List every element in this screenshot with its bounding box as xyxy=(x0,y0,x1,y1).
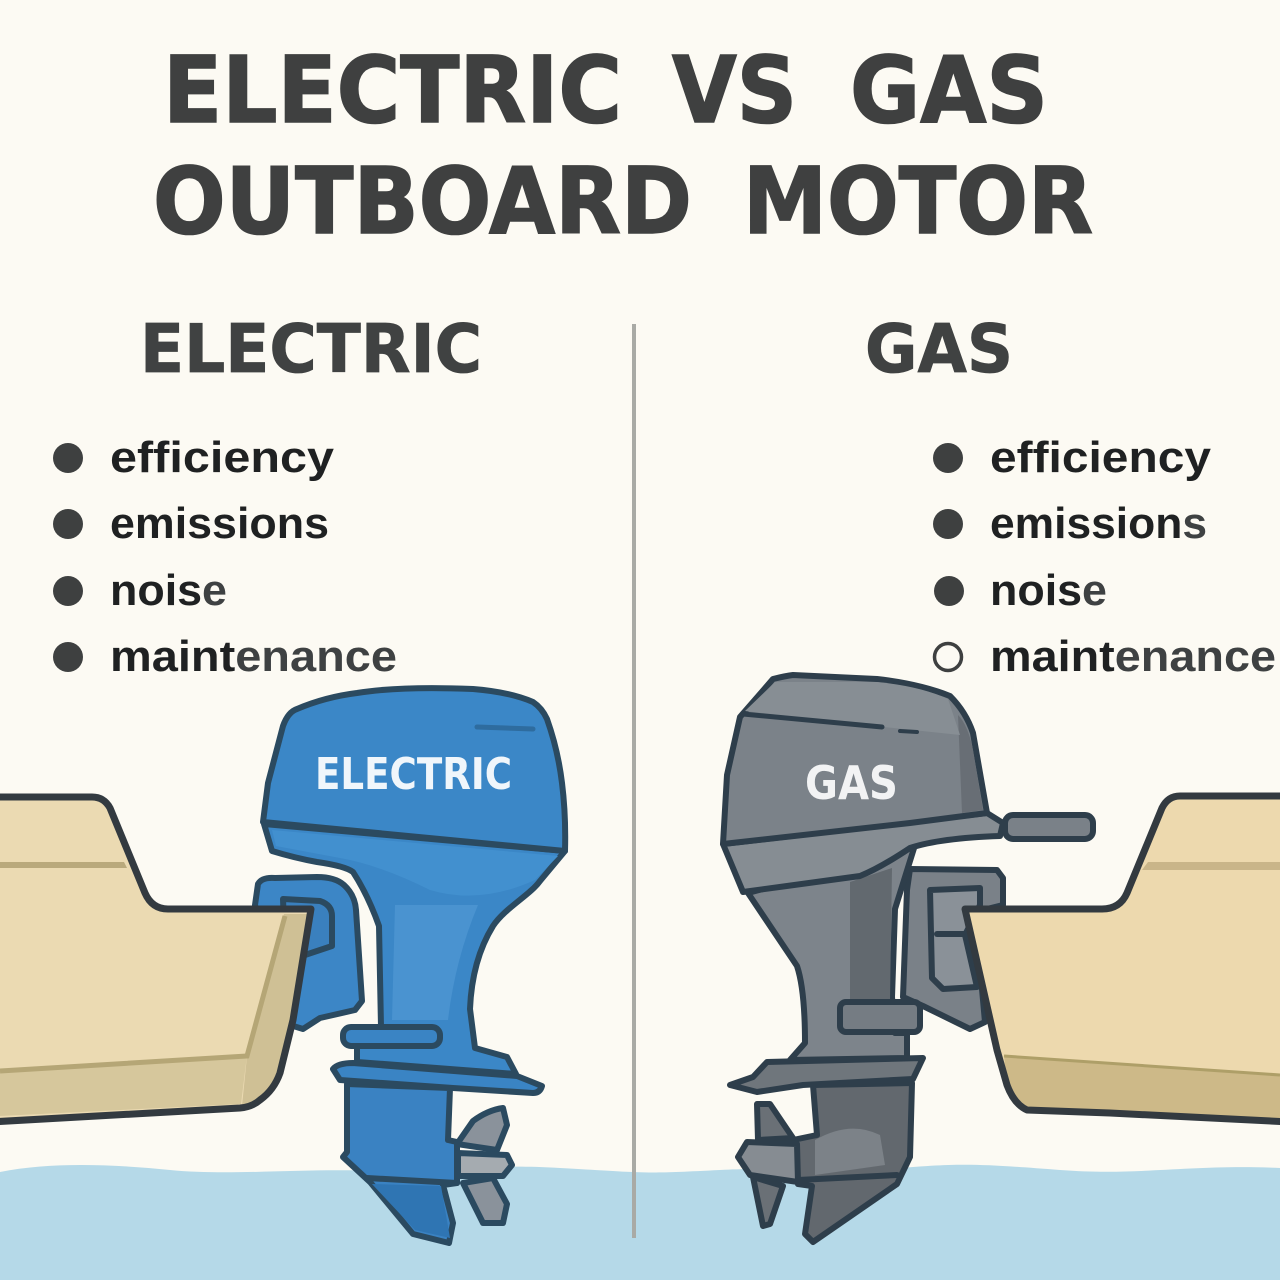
cavitation line xyxy=(367,1178,457,1183)
propeller upper blade xyxy=(757,1104,793,1140)
leg shade xyxy=(850,868,892,1000)
propeller hub xyxy=(458,1153,512,1176)
title: ELECTRIC xyxy=(163,37,622,144)
collar xyxy=(840,1002,920,1032)
cowling streak xyxy=(477,727,533,729)
clamp: gas xyxy=(903,869,1003,1029)
gas cowling label: GAS xyxy=(805,756,898,810)
title xyxy=(153,37,1093,255)
lower cowl and tiller arm xyxy=(723,813,1003,892)
cavitation line xyxy=(798,1175,897,1180)
list: electric features xyxy=(53,433,397,681)
motor: electric xyxy=(263,688,565,1243)
list: gas features: noise xyxy=(990,566,1107,615)
list: gas features xyxy=(933,433,1276,681)
leg highlight xyxy=(392,905,478,1020)
water xyxy=(0,1165,1280,1280)
list: electric features: maintenance xyxy=(110,632,397,681)
propeller lower blade xyxy=(753,1177,783,1226)
heading: gas: GAS xyxy=(865,310,1013,388)
list: electric features: emissions xyxy=(110,499,329,548)
list: electric features: noise xyxy=(110,566,227,615)
lower cowl highlight xyxy=(272,830,558,896)
clamp: electric xyxy=(255,877,362,1029)
title: OUTBOARD xyxy=(153,148,692,255)
cowling xyxy=(723,675,987,844)
lower unit xyxy=(343,1084,457,1243)
propeller upper blade xyxy=(457,1108,507,1150)
cowling groove end xyxy=(900,731,917,732)
heading: electric: ELECTRIC xyxy=(140,310,482,388)
tiller handle xyxy=(1005,815,1093,839)
electric cowling label: ELECTRIC xyxy=(315,749,512,800)
boat: electric side xyxy=(0,797,311,1122)
leg xyxy=(748,845,915,1060)
title: VS xyxy=(672,37,797,144)
propeller hub xyxy=(738,1142,798,1182)
center divider xyxy=(632,324,636,1238)
cowling xyxy=(263,688,565,851)
title: GAS xyxy=(850,37,1048,144)
title: MOTOR xyxy=(743,148,1093,255)
lower unit xyxy=(793,1083,912,1242)
cowling shade xyxy=(958,715,983,813)
collar xyxy=(343,1027,440,1046)
leg and lower cowl xyxy=(264,824,565,1074)
cowling groove xyxy=(743,714,882,727)
anti-ventilation plate xyxy=(730,1058,923,1092)
lower unit shade xyxy=(372,1184,450,1238)
cowling top highlight xyxy=(745,682,960,735)
list: gas features: maintenance xyxy=(990,632,1276,681)
list: gas features: efficiency xyxy=(990,433,1212,482)
list: gas features: emissions xyxy=(990,499,1207,548)
motor: gas xyxy=(723,675,1093,1242)
list: electric features: efficiency xyxy=(110,433,335,482)
boat: gas side xyxy=(965,796,1280,1122)
lower unit highlight xyxy=(815,1129,885,1175)
propeller lower blade xyxy=(463,1178,507,1223)
anti-ventilation plate xyxy=(333,1063,542,1093)
